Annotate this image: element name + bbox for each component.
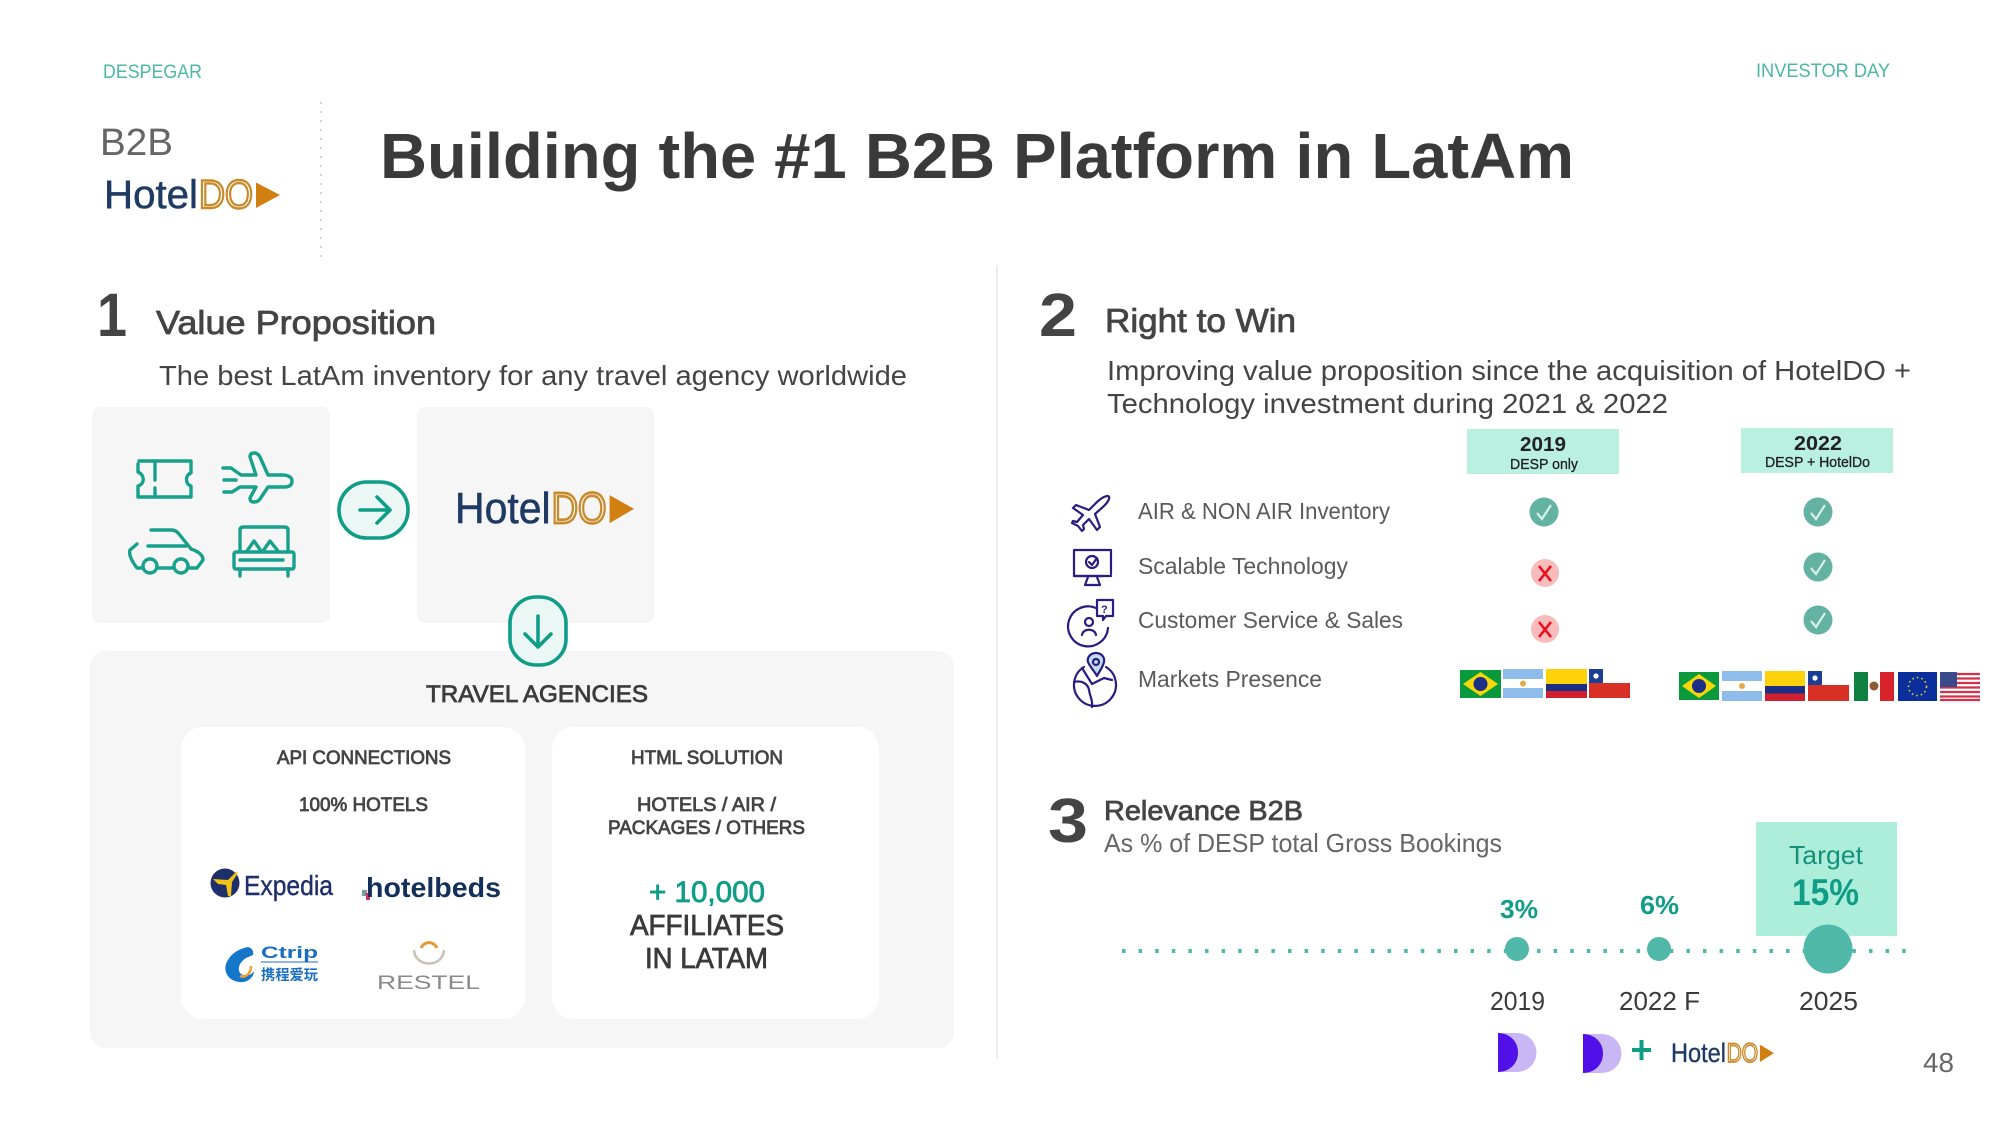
column header 2022: DESP + HotelDo [1765, 455, 1870, 471]
column header 2019: 2019 [1520, 434, 1566, 456]
title: Building the #1 B2B Platform in LatAm [380, 120, 1574, 192]
heading: Right to Win: Right to Win [1105, 302, 1296, 339]
row: air and non air inventory: AIR & NON AIR Inventory [1138, 498, 1390, 524]
timeline: 2019 [1490, 986, 1545, 1016]
heading: Value Proposition: Value Proposition [156, 304, 436, 341]
section 3: relevance B2B [1048, 787, 1906, 1073]
number 1: 1 [97, 281, 127, 349]
logo: Expedia [210, 868, 333, 901]
card: API connections: 100% HOTELS [299, 795, 428, 816]
card: HTML solution [552, 727, 879, 1019]
logo: Ctrip: 携程爱玩 [261, 966, 318, 984]
logo: HotelDO center: Hotel [455, 484, 551, 532]
logo: Expedia: Expedia [244, 870, 333, 901]
logo: HotelDO small: Hotel [1671, 1038, 1726, 1068]
row: markets presence: Markets Presence [1138, 666, 1322, 692]
subheading: The best LatAm inventory for any travel agency worldwide [159, 360, 907, 391]
card: API connections [181, 727, 525, 1019]
timeline: 2025 [1799, 986, 1858, 1016]
icon: monitor [1074, 550, 1111, 585]
logo: HotelDO header [104, 173, 280, 217]
logo: hotelbeds: hotelbeds [366, 872, 501, 903]
number 2: 2 [1039, 281, 1077, 349]
logo: Ctrip: Ctrip [261, 943, 318, 962]
description: Technology investment during 2021 & 2022 [1107, 388, 1668, 419]
icon: globe and pin [1074, 653, 1116, 707]
row: scalable technology [1074, 550, 1348, 585]
icon: arrow right [339, 482, 408, 538]
card: HTML solution: AFFILIATES [630, 910, 784, 942]
card: HTML solution: PACKAGES / OTHERS [608, 818, 805, 839]
label: B2B: B2B [100, 122, 173, 164]
heading: Relevance B2B: Relevance B2B [1104, 795, 1303, 826]
logo: Restel: RESTEL [377, 973, 480, 994]
logo: HotelDO header: Hotel [104, 173, 198, 217]
panel: HotelDO [417, 407, 654, 623]
card: HTML solution: IN LATAM [645, 943, 768, 975]
section 2: right to win [1039, 281, 1980, 707]
timeline [1122, 890, 1906, 1016]
heading: travel agencies: TRAVEL AGENCIES [426, 681, 648, 708]
panel: travel agencies [90, 651, 954, 1048]
callout: target [1756, 822, 1897, 936]
row: customer service and sales [1068, 600, 1403, 646]
card: HTML solution: HOTELS / AIR / [637, 795, 777, 816]
header label: Investor Day: INVESTOR DAY [1756, 60, 1890, 82]
icon: car [130, 530, 203, 573]
column header 2019: DESP only [1510, 457, 1579, 473]
logo: HotelDO center [455, 484, 634, 532]
logo: Ctrip [225, 943, 318, 984]
icon: plane [223, 453, 292, 502]
logo: HotelDO center: DO [552, 484, 607, 532]
subheading: As % of DESP total Gross Bookings [1104, 828, 1502, 858]
row: air and non air inventory [1072, 496, 1390, 531]
timeline: 6% [1640, 890, 1679, 920]
logo: HotelDO small [1671, 1038, 1774, 1068]
row: customer service and sales: Customer Service & Sales [1138, 607, 1403, 633]
row: scalable technology: Scalable Technology [1138, 553, 1348, 579]
header label: Despegar: DESPEGAR [103, 61, 202, 83]
flags 2019 [1460, 669, 1630, 698]
timeline: 2022 F [1619, 986, 1700, 1016]
status checks [1530, 498, 1832, 643]
icon: arrow down [510, 597, 566, 665]
column header 2022 [1741, 428, 1893, 473]
logo: HotelDO small: DO [1727, 1038, 1758, 1068]
column header 2019 [1467, 429, 1619, 474]
card: API connections: API CONNECTIONS [277, 748, 451, 769]
logo: Despegar 2022 [1583, 1034, 1622, 1073]
callout: target: Target [1789, 840, 1864, 870]
icon: ticket [138, 461, 191, 497]
row: markets presence [1074, 653, 1322, 707]
description: Improving value proposition since the acquisition of HotelDO + [1107, 355, 1911, 386]
timeline: 3% [1500, 894, 1538, 924]
card: HTML solution: HTML SOLUTION [631, 748, 783, 769]
plus sign [1632, 1040, 1651, 1060]
icon: customer service: ? [1101, 604, 1108, 616]
icon: airplane [1072, 496, 1109, 531]
logo: HotelDO header: DO [199, 173, 253, 217]
description [1107, 355, 1911, 419]
panel: travel products [92, 407, 330, 623]
logo: Despegar 2019 [1498, 1033, 1537, 1072]
number 3: 3 [1048, 787, 1088, 856]
icon: bed [234, 527, 294, 576]
section 1: value proposition [90, 281, 954, 1048]
page number: 48 [1923, 1047, 1954, 1078]
column header 2022: 2022 [1794, 433, 1842, 455]
card: HTML solution: + 10,000 [649, 876, 765, 909]
logo: Restel [377, 943, 480, 994]
icon: customer service [1068, 600, 1113, 646]
callout: target: 15% [1792, 872, 1859, 913]
flags 2022 [1679, 671, 1980, 701]
